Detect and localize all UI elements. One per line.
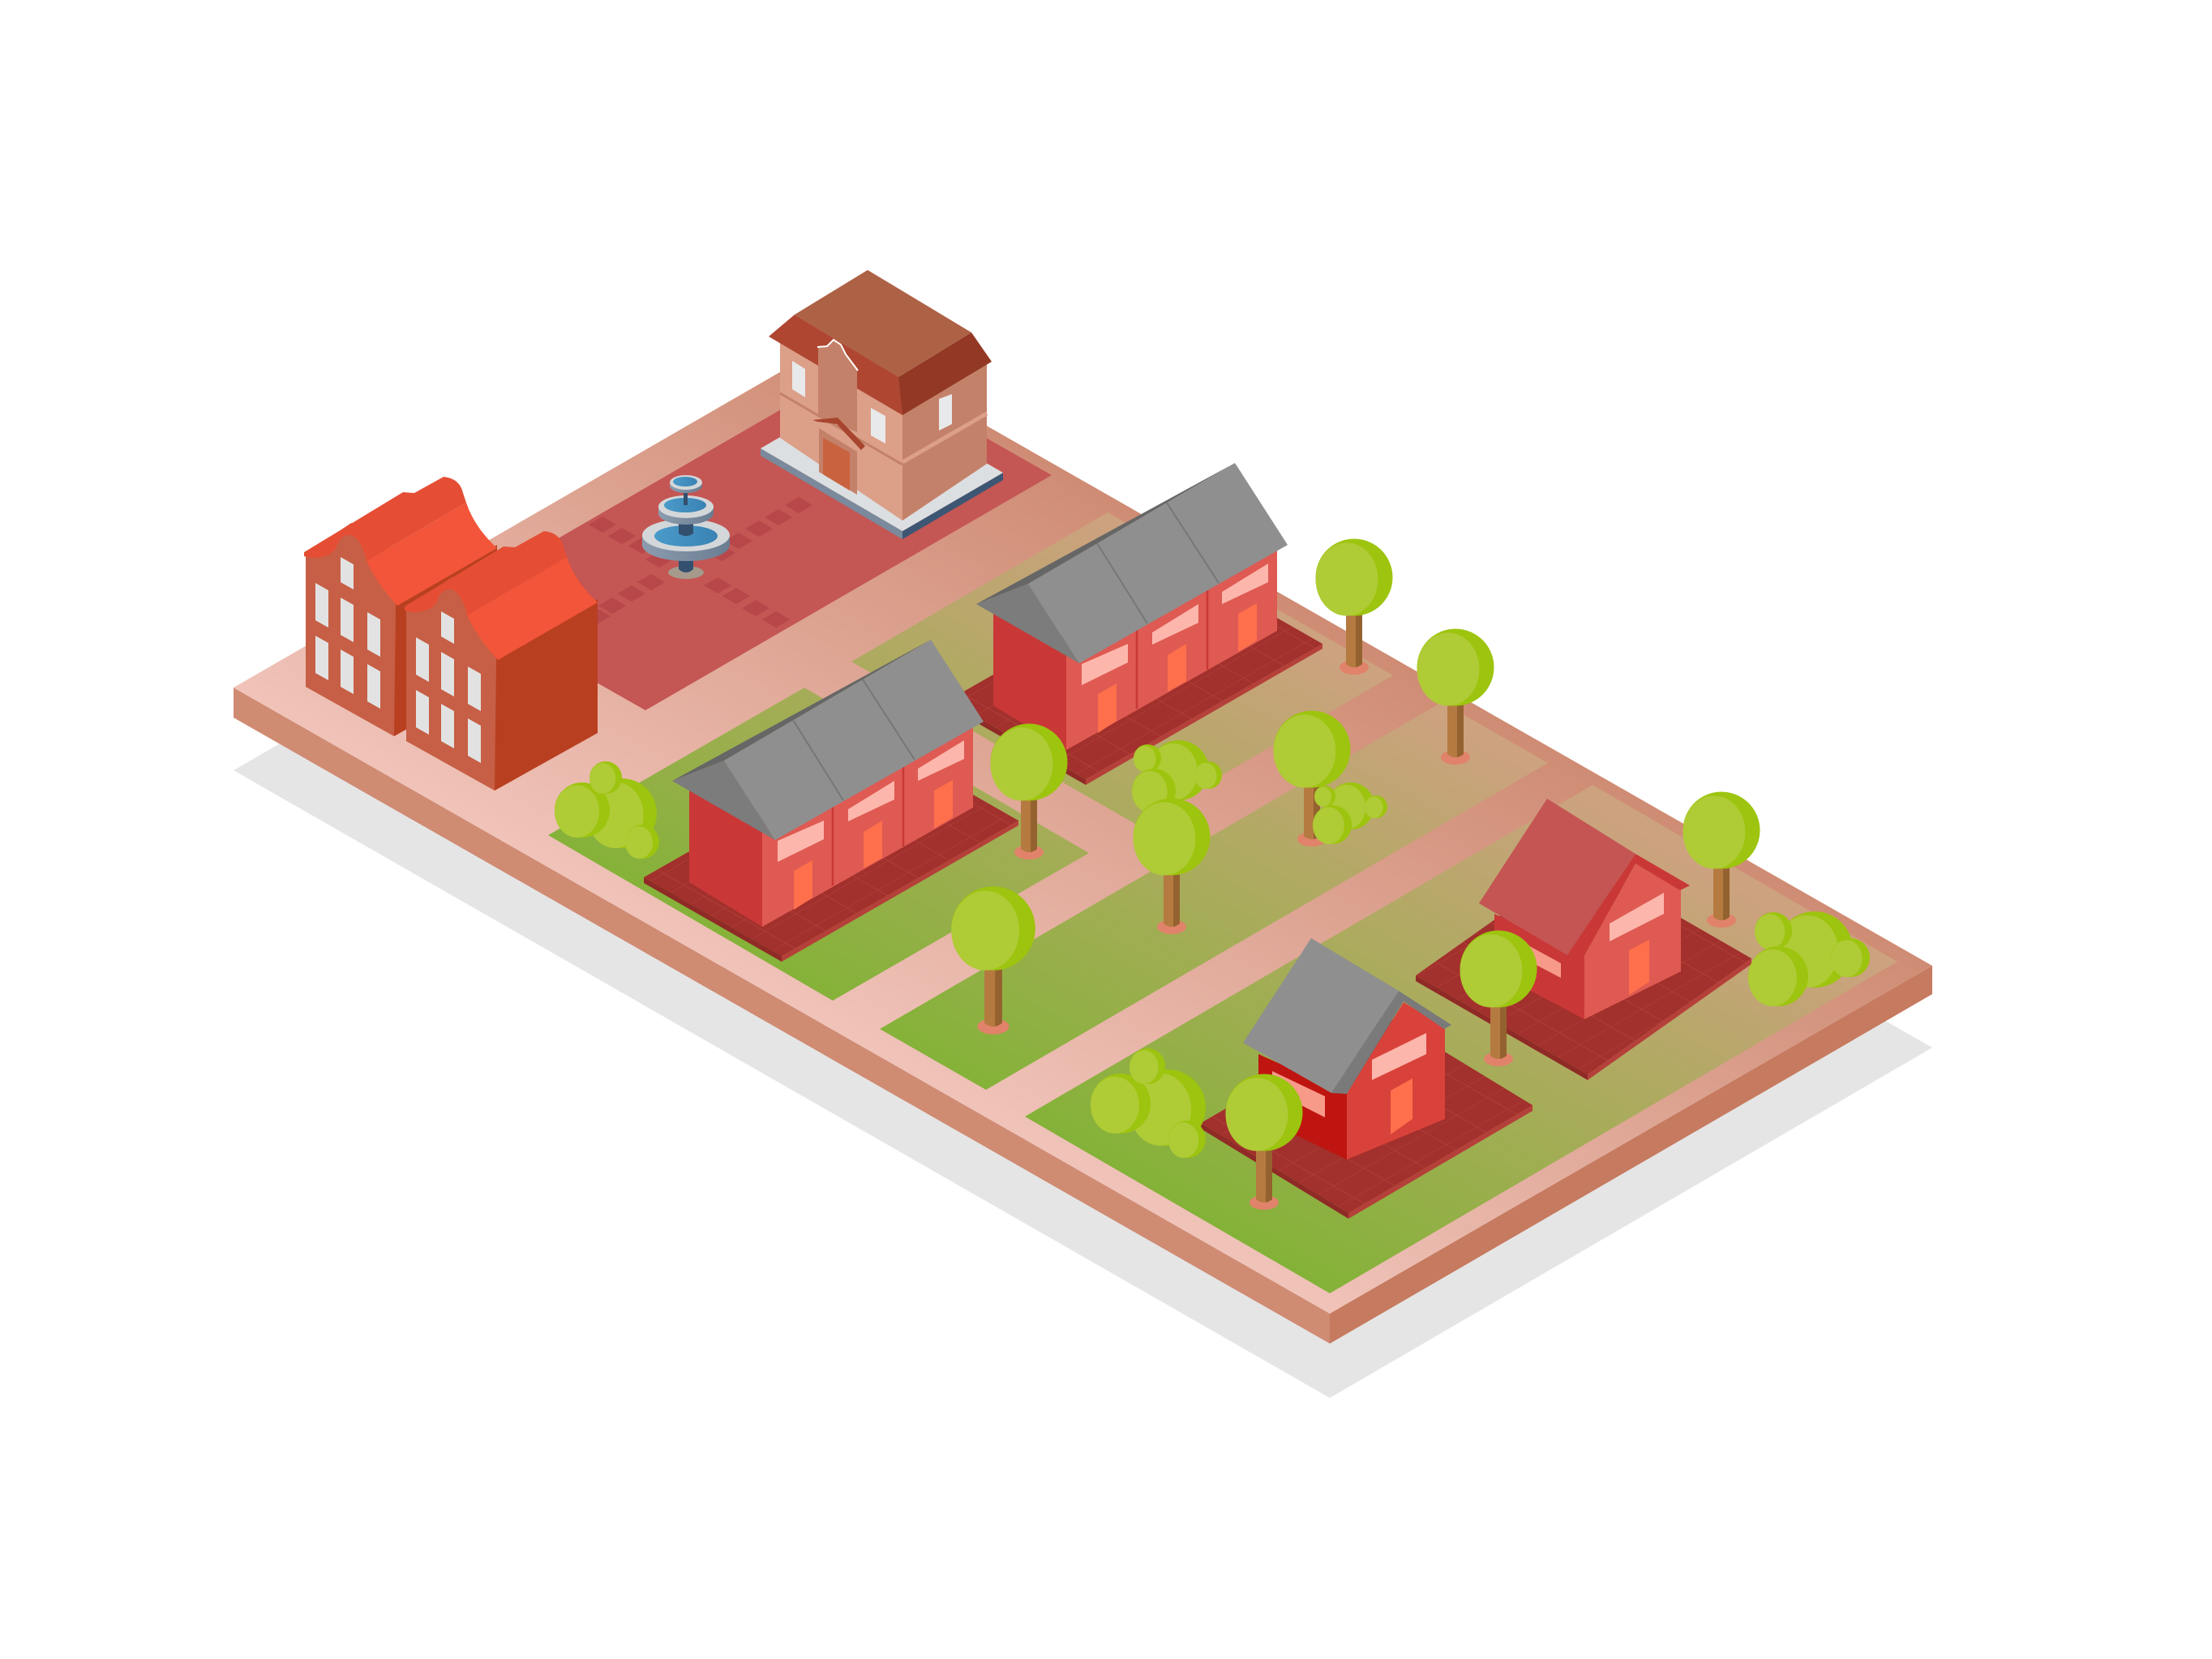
- paving: [1416, 860, 1751, 1080]
- tree: [951, 886, 1035, 1035]
- row house roof: [976, 463, 1288, 663]
- grass block B: [880, 702, 1548, 1090]
- row house windows: [1082, 564, 1268, 685]
- hall walls: [780, 341, 987, 521]
- tree: [1134, 798, 1210, 934]
- bush: [1748, 911, 1870, 1006]
- roof: [1243, 938, 1451, 1094]
- dutch side wall: [394, 545, 497, 736]
- door: [1391, 1078, 1413, 1134]
- hall door: [819, 428, 857, 495]
- window: [1610, 893, 1664, 941]
- grass block D: [1025, 785, 1897, 1293]
- town square plaza: [452, 365, 1052, 710]
- tree: [1315, 538, 1393, 675]
- row house gable wall: [993, 606, 1066, 750]
- hall roof: [769, 270, 992, 415]
- dutch windows: [315, 557, 380, 709]
- row house front wall: [1066, 529, 1277, 750]
- row house doors: [1098, 603, 1257, 733]
- left window: [1272, 1071, 1325, 1117]
- plaza paving tiles: [583, 497, 812, 628]
- ground shadow: [234, 422, 1932, 1398]
- small house red roof: [1416, 799, 1751, 1080]
- dutch roof: [304, 477, 497, 606]
- left window: [1527, 945, 1561, 978]
- tree: [1417, 629, 1494, 765]
- left wall: [1258, 1054, 1347, 1160]
- small house gray roof: [1201, 938, 1533, 1219]
- bush: [1132, 740, 1222, 812]
- grass block A: [548, 688, 1089, 1001]
- roof: [1479, 799, 1690, 955]
- hall windows: [792, 361, 952, 444]
- tree: [1226, 1074, 1302, 1210]
- dutch house front: [405, 531, 598, 791]
- bush: [1091, 1048, 1206, 1158]
- left wall: [1494, 914, 1584, 1019]
- dutch house back: [304, 477, 497, 736]
- window: [1372, 1033, 1426, 1080]
- hall central gable: [812, 340, 865, 450]
- front row house: [644, 640, 1018, 962]
- hall base plate: [761, 390, 1003, 539]
- back row house: [948, 463, 1322, 785]
- tree: [1273, 710, 1351, 847]
- town hall: [761, 270, 1003, 539]
- tree: [1460, 931, 1537, 1066]
- door: [1629, 940, 1649, 995]
- fountain: [642, 475, 730, 579]
- grass block C: [851, 512, 1393, 825]
- row house paving: [948, 565, 1322, 785]
- bush: [555, 761, 659, 859]
- right wall: [1584, 864, 1681, 1019]
- tree: [1683, 791, 1760, 928]
- right wall: [1347, 1002, 1445, 1160]
- dutch gable wall: [306, 523, 396, 736]
- platform base: [234, 340, 1932, 1344]
- paving: [1201, 1015, 1533, 1219]
- tree: [991, 723, 1067, 860]
- bush: [1313, 782, 1387, 844]
